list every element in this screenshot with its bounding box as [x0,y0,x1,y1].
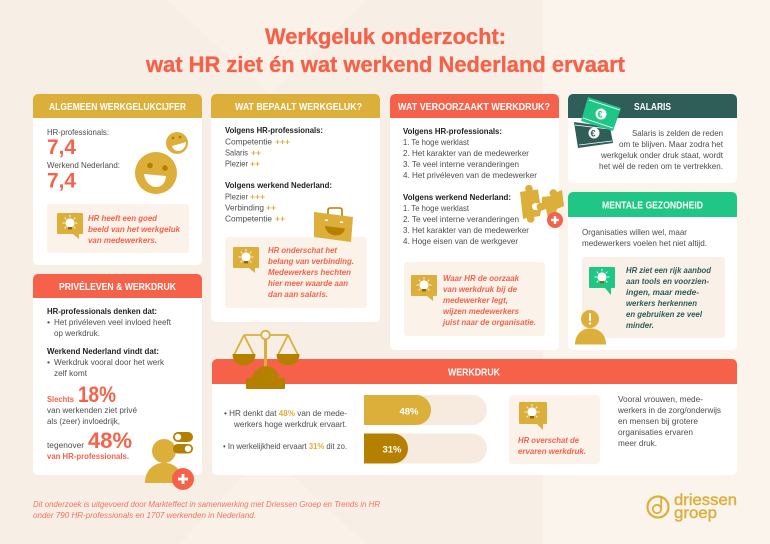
callout text: aan tools en voorzien- [626,276,709,286]
callout [404,262,545,336]
list: volgens werkend Nederland: +++ [250,192,265,202]
list: volgens werkend Nederland: ++ [266,202,276,212]
panel header: mentale gezondheid: MENTALE GEZONDHEID [602,200,703,212]
callout text [442,273,536,327]
text block: werkend Nederland vindt dat: zelf komt [54,368,88,378]
callout text: Waar HR de oorzaak [443,273,520,283]
panel header: algemeen werkgelukcijfer [33,94,202,118]
list: volgens werkend Nederland: Verbinding [225,202,264,212]
text block: werkend Nederland vindt dat: Werkdruk vooral door het werk [54,357,165,367]
list: volgens HR-professionals: 2. Het karakter van de medewerker [403,148,529,158]
text block: HR-professionals denken dat: op werkdruk. [54,328,100,338]
panel header: algemeen werkgelukcijfer: ALGEMEEN WERKGELUKCIJFER [49,101,186,113]
callout text [626,265,712,330]
panel header: wat veroorzaakt werkdruk: WAT VEROORZAAKT WERKDRUK? [398,101,550,113]
statistic: 18%: Slechts [47,394,74,404]
statistic: 48%: 48% [88,428,132,453]
icon: banknotes: € [598,110,603,120]
text block: HR-professionals denken dat: • [47,317,50,327]
icon: puzzle pieces with plus [520,185,564,228]
callout text: van werkdruk bij de [443,284,517,294]
panel header: mentale gezondheid [568,192,737,217]
callout text: medewerker legt, [443,295,508,305]
panel header: salaris: SALARIS [634,101,671,113]
panel header: wat bepaalt werkgeluk [211,94,380,118]
callout text: ingen, maar mede- [626,287,699,297]
panel header: privéleven en werkdruk [33,274,202,298]
callout text: HR heeft een goed [88,213,158,223]
footnote: Dit onderzoek is uitgevoerd door Markteffect in samenwerking met Driessen Groep en Trends in HR [33,499,380,509]
text block: vooral vrouwen: Vooral vrouwen, mede- [618,394,703,404]
text block: vooral vrouwen: meer druk. [618,438,657,448]
icon: banknotes: € [590,128,596,138]
footnote [33,499,380,520]
list: volgens HR-professionals: ++ [250,158,260,168]
title [145,24,626,77]
icon: lightbulb [57,213,83,239]
icon: lightbulb [519,402,547,430]
icon: lightbulb [411,275,437,301]
bar: 48%: 48% [399,406,419,418]
logo: driessen groep [648,492,737,522]
icon: scales [232,331,300,389]
statistic: 18%: 18% [78,382,116,407]
text block: HR-professionals denken dat [47,306,172,338]
logo: driessen groep: driessen [674,492,737,509]
text block: werkend Nederland vindt dat: • [47,357,50,367]
list: volgens HR-professionals: Plezier [225,158,248,168]
text block: salaris: het wél de reden om te vertrekken. [599,161,723,171]
score: HR-professionals: HR-professionals: [47,127,109,137]
list: volgens werkend Nederland: 4. Hoge eisen van de werkgever [403,236,518,246]
list: volgens HR-professionals: Volgens HR-professionals: [225,125,323,135]
text block: salaris: Salaris is zelden de reden [632,128,723,138]
list: volgens HR-professionals: Volgens HR-professionals: [403,126,502,136]
title: wat HR ziet én wat werkend Nederland ervaart [145,52,626,77]
callout text: HR ziet een rijk aanbod [626,265,712,275]
bar chart [364,395,487,464]
callout text [88,213,181,245]
text block: mentale gezondheid: Organisaties willen wel, maar [582,227,687,237]
list: volgens werkend Nederland: ++ [275,214,285,224]
text block: salaris: om te blijven. Maar zodra het [619,139,724,149]
panel header: wat bepaalt werkgeluk: WAT BEPAALT WERKGELUK? [235,101,362,113]
text block: HR-professionals denken dat: Het privéleven veel invloed heeft [54,317,172,327]
list: volgens werkend Nederland: Plezier [225,192,248,202]
logo: driessen groep: groep [674,505,717,522]
statistic: 48% [47,428,132,461]
text block: HR-professionals denken dat: HR-professionals denken dat: [47,306,157,316]
list: volgens werkend Nederland: 2. Te veel interne veranderingen [403,214,519,224]
list: volgens HR-professionals: ++ [251,148,261,158]
list: volgens werkend Nederland: Competentie [225,214,272,224]
callout text: en gebruiken ze veel [626,309,703,319]
callout text: hier meer waarde aan [268,278,348,288]
callout text: Medewerkers hechten [268,267,351,277]
statistic: 18%: als (zeer) invloedrijk, [47,416,120,426]
list: volgens werkend Nederland: Volgens werkend Nederland: [225,180,332,190]
callout text: juist naar de organisatie. [442,317,536,327]
panel: wat veroorzaakt werkdruk [390,94,564,350]
callout text: beeld van het werkgeluk [88,224,181,234]
text block: percentages: • HR denkt dat 48% van de mede- [224,408,347,418]
callout [47,204,189,253]
list: volgens werkend Nederland: 3. Het karakter van de medewerker [403,225,529,235]
text block: vooral vrouwen: organisaties ervaren [618,427,693,437]
title: Werkgeluk onderzocht: [265,24,506,49]
panel header: wat veroorzaakt werkdruk [390,94,559,118]
panel: privéleven en werkdruk [33,274,202,490]
callout text: minder. [626,320,654,330]
list: volgens HR-professionals: Competentie [225,136,272,146]
panel: algemeen werkgelukcijfer [33,94,202,265]
text block: percentages [223,408,347,451]
panel header: privéleven en werkdruk: PRIVÉLEVEN & WERKDRUK [59,280,176,293]
callout text: werkers herkennen [626,298,697,308]
callout text: wijzen medewerkers [443,306,519,316]
icon: banknotes [574,97,621,148]
text block: percentages: werkers hoge werkdruk ervaart. [233,419,347,429]
panel: salaris [568,94,737,183]
callout text: HR overschat de [518,435,579,445]
icon: person with exclamation mark [575,310,606,344]
callout text: belang van verbinding. [268,256,354,266]
panel header: werkdruk [212,359,737,384]
panel header: werkdruk: WERKDRUK [448,366,500,378]
panel: wat bepaalt werkgeluk [211,94,380,322]
list: volgens HR-professionals: 3. Te veel interne veranderingen [403,159,519,169]
text block: werkend Nederland vindt dat [47,346,165,378]
list: volgens HR-professionals [225,125,323,168]
panel: mentale gezondheid [568,192,737,350]
text block: salaris [599,128,724,171]
list: volgens HR-professionals: 4. Het privéleven van de medewerker [403,170,537,180]
statistic: 18% [47,382,137,426]
text block: salaris: werkgeluk onder druk staat, wordt [600,150,724,160]
score: werkend Nederland: 7,4 [47,170,76,192]
icon: person with toggles and plus [145,432,194,490]
statistic: 48%: tegenover [47,440,84,450]
score: werkend Nederland: Werkend Nederland: [47,160,120,170]
score: werkend Nederland [47,160,120,192]
list: volgens werkend Nederland: Volgens werkend Nederland: [403,192,511,202]
callout text: HR onderschat het [268,245,338,255]
callout text [268,245,354,299]
icon: lightbulb [589,267,615,295]
icon: small smiley [166,132,188,154]
callout text [518,435,586,456]
list: volgens werkend Nederland: 1. Te hoge werklast [403,203,470,213]
text block: werkend Nederland vindt dat: Werkend Nederland vindt dat: [47,346,159,356]
callout text: ervaren werkdruk. [518,446,586,456]
list: volgens werkend Nederland [225,180,332,224]
callout text: van medewerkers. [88,235,157,245]
icon: large smiley [135,152,177,194]
text block: percentages: • In werkelijkheid ervaart 31% dit zo. [223,441,347,451]
panel: werkdruk [212,331,737,475]
list: volgens werkend Nederland [403,192,529,246]
callout [509,395,600,464]
callout [225,237,367,308]
icon: lightbulb [233,247,259,273]
text block: mentale gezondheid [582,227,707,248]
statistic: 48%: van HR-professionals. [47,451,129,461]
statistic: 18%: van werkenden ziet privé [47,405,137,415]
list: volgens HR-professionals [403,126,537,180]
text block: vooral vrouwen: werkers in de zorg/onderwijs [617,405,722,415]
callout text: dan aan salaris. [268,289,328,299]
footnote: onder 790 HR-professionals en 1707 werkenden in Nederland. [33,510,256,520]
callout [582,257,725,338]
text block: mentale gezondheid: medewerkers voelen het niet altijd. [582,238,707,248]
text block: vooral vrouwen: en mensen bij grotere [618,416,698,426]
score: HR-professionals [47,127,109,159]
list: volgens HR-professionals: +++ [275,136,290,146]
list: volgens HR-professionals: Salaris [225,148,249,158]
text block: vooral vrouwen [617,394,722,448]
score: HR-professionals: 7,4 [47,136,76,159]
panel header: salaris [568,94,737,118]
list: volgens HR-professionals: 1. Te hoge werklast [403,137,470,147]
icon: smiling briefcase [314,208,353,242]
bar: 31%: 31% [382,444,402,456]
